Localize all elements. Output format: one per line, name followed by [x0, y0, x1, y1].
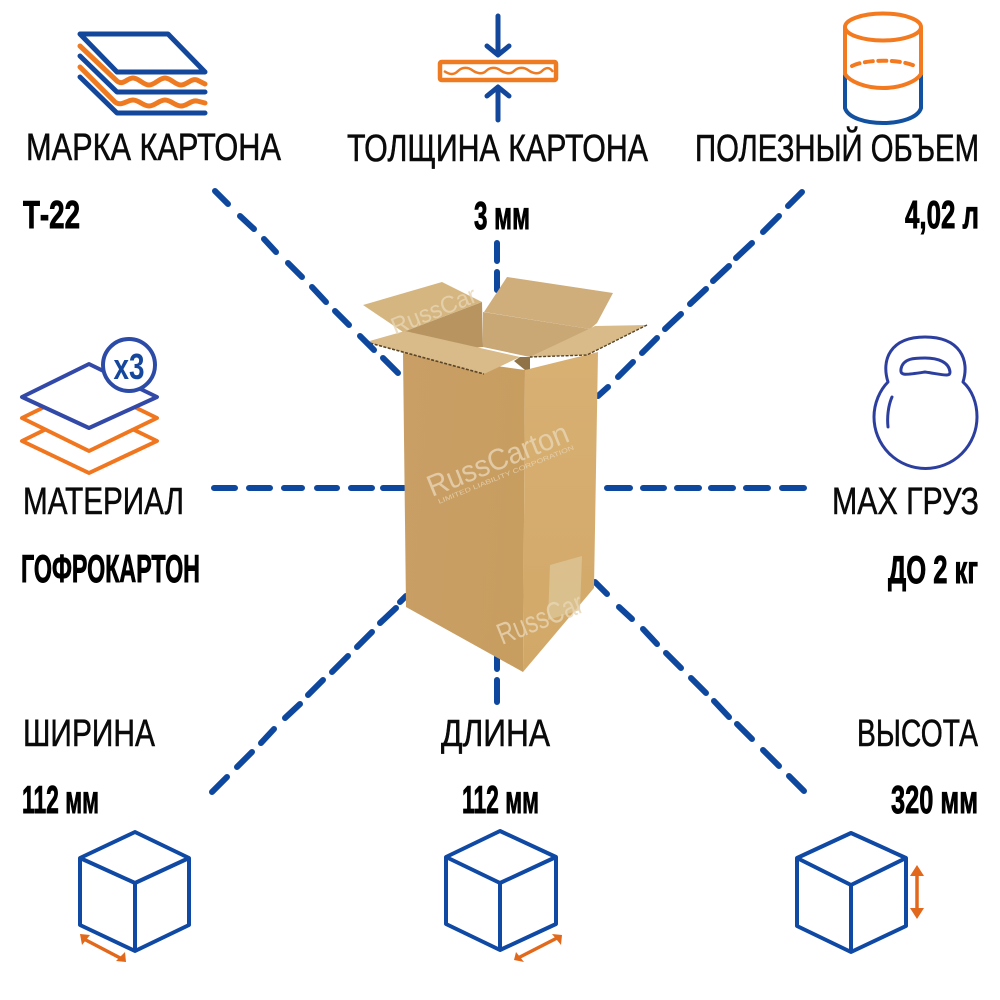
- watermark: box centre: LIMITED LIABILITY CORPORATION: [437, 444, 576, 506]
- icon: box length: [446, 831, 562, 962]
- icon: cylinder volume: [845, 14, 921, 123]
- heading: brand: МАРКА КАРТОНА: [26, 127, 282, 169]
- icon: thickness: [440, 16, 556, 120]
- icon: kettlebell: [874, 337, 977, 469]
- dash over box flap: [360, 336, 374, 350]
- heading: length: ДЛИНА: [441, 713, 551, 755]
- icon: box width: [80, 832, 189, 962]
- watermark: box top: RussCar: [387, 282, 481, 341]
- watermark: box bottom: RussCar: [492, 587, 588, 651]
- cardboard box photo: [363, 277, 647, 672]
- icon: three layers x3: x3: [114, 346, 144, 387]
- value: thickness: 3 мм: [474, 195, 530, 238]
- icon: corrugated layers: [80, 34, 205, 113]
- icon: three layers x3: [22, 339, 157, 473]
- icon: box height: [797, 833, 924, 952]
- value: length: 112 мм: [462, 779, 539, 822]
- watermark: box centre: RussCarton: [422, 417, 574, 503]
- value: material: ГОФРОКАРТОН: [21, 548, 200, 591]
- heading: width: ШИРИНА: [23, 713, 156, 755]
- value: width: 112 мм: [22, 779, 99, 822]
- dashed connector lines: [212, 191, 804, 792]
- value: brand: Т-22: [23, 194, 80, 237]
- heading: material: МАТЕРИАЛ: [23, 481, 184, 523]
- heading: thickness: ТОЛЩИНА КАРТОНА: [347, 128, 649, 170]
